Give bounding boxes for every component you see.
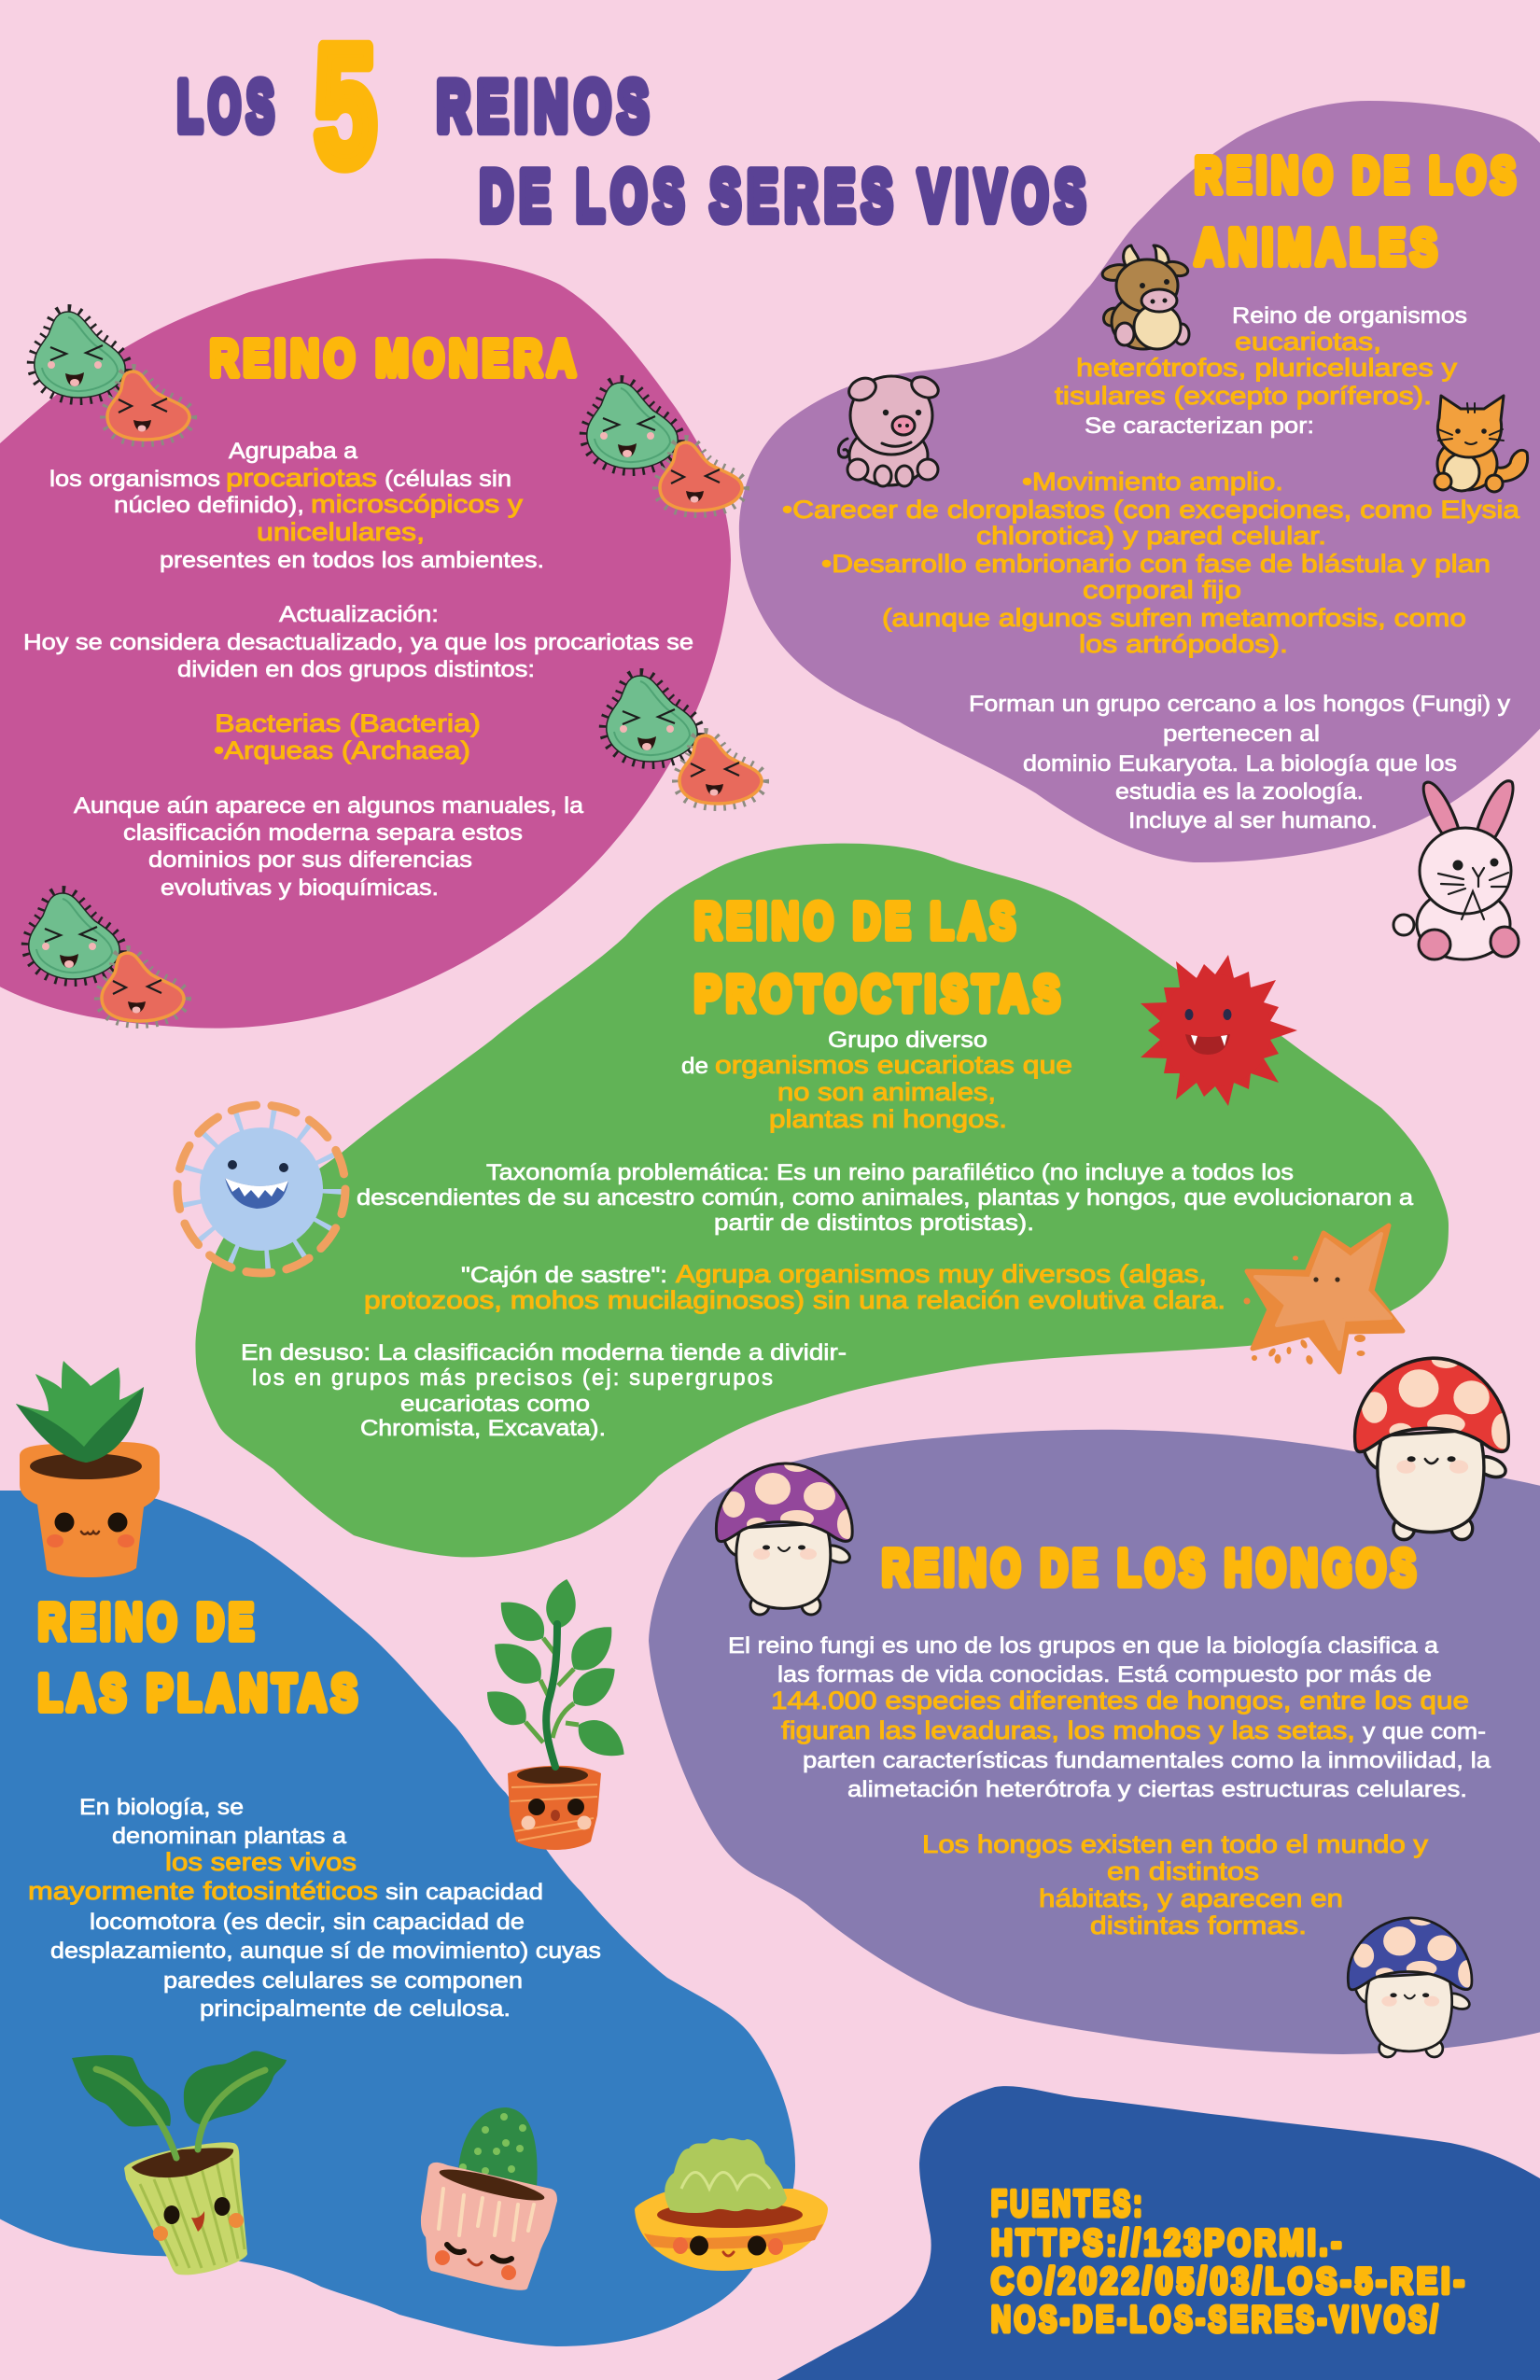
panel content: reino de los animales [782, 147, 1520, 833]
text block: protoctistas description: Taxonomía problemática: Es un reino parafilético (no incluye a todos los [486, 1160, 1294, 1185]
icon: bacteria pair top left [35, 312, 189, 440]
text block: monera description: dividen en dos grupos distintos: [177, 657, 535, 682]
icon: rabbit [1393, 781, 1519, 959]
text block: hongos description: Los hongos existen en todo el mundo y [922, 1830, 1429, 1858]
text block: animales description: pertenecen al [1163, 721, 1320, 747]
text block: animales description: Incluye al ser humano. [1128, 808, 1378, 833]
icon: cactus in pink pot [421, 2107, 557, 2290]
icon: tiger cat [1435, 396, 1528, 492]
panel content: reino de los hongos [728, 1540, 1491, 1939]
panel shape: reino de las protoctistas [195, 844, 1449, 1557]
text block: plantas description: los seres vivos [165, 1848, 357, 1876]
icon: succulent in orange pot [16, 1361, 160, 1577]
title: LOS [177, 67, 280, 147]
text block: monera description [23, 439, 693, 901]
text block: protoctistas description: partir de distintos protistas). [714, 1211, 1034, 1236]
heading: reino de las protoctistas [694, 893, 1065, 1022]
text block: monera description: Aunque aún aparece en algunos manuales, la [74, 793, 584, 819]
text block: protoctistas description: "Cajón de sastre": [461, 1263, 667, 1288]
text block: protoctistas description: no son animales, [777, 1078, 996, 1106]
text block: protoctistas description: los en grupos más precisos (ej: supergrupos [252, 1365, 773, 1391]
text block: monera description: Actualización: [279, 602, 439, 627]
panel shape: reino monera [0, 259, 731, 1029]
heading: reino de las plantas: REINO DE [38, 1594, 259, 1650]
text block: monera description: procariotas [226, 464, 377, 492]
text block: protoctistas description: Agrupa organismos muy diversos (algas, [676, 1260, 1207, 1288]
text block: protoctistas description: descendientes de su ancestro común, como animales, plantas y hongos, que evolucionaron a [357, 1185, 1414, 1211]
text block: hongos description: parten características fundamentales como la inmovilidad, la [803, 1748, 1491, 1773]
title [177, 10, 1092, 236]
panel content: fuentes [991, 2184, 1468, 2340]
text block: monera description: Agrupaba a [229, 439, 358, 464]
panel shape: reino de los hongos [649, 1430, 1540, 2054]
text block: hongos description [728, 1633, 1491, 1939]
text block: animales description: los artrópodos). [1079, 630, 1288, 658]
text block: protoctistas description: En desuso: La clasificación moderna tiende a dividir- [241, 1340, 847, 1365]
title number 5: 5 [315, 10, 376, 201]
text block: animales description: •Desarrollo embrionario con fase de blástula y plan [821, 550, 1491, 578]
heading: reino de los animales: ANIMALES [1195, 219, 1442, 275]
panel shape: reino de las plantas [0, 1491, 795, 2346]
text block: sources: FUENTES: [991, 2184, 1145, 2224]
text block: monera description: dominios por sus diferencias [148, 847, 472, 873]
text block: plantas description: mayormente fotosintéticos [28, 1877, 378, 1905]
text block: protoctistas description: Grupo diverso [828, 1028, 987, 1053]
text block: monera description: Hoy se considera desactualizado, ya que los procariotas se [23, 630, 693, 655]
icon: cow [1101, 245, 1189, 349]
text block: plantas description: denominan plantas a [112, 1824, 347, 1849]
text block: animales description: Forman un grupo cercano a los hongos (Fungi) y [969, 692, 1510, 717]
icon: bacteria pair middle right [607, 676, 762, 804]
text block: protoctistas description: plantas ni hongos. [769, 1105, 1007, 1133]
heading: reino de las protoctistas: PROTOCTISTAS [694, 966, 1065, 1022]
heading: reino monera: REINO MONERA [210, 330, 581, 386]
text block: monera description: microscópicos y [311, 490, 524, 518]
panel content: reino de las plantas [28, 1594, 601, 2022]
text block: animales description: Se caracterizan por: [1085, 413, 1314, 439]
text block: hongos description: 144.000 especies diferentes de hongos, entre los que [771, 1687, 1469, 1715]
text block: plantas description: principalmente de celulosa. [200, 1996, 511, 2022]
text block: animales description [782, 303, 1520, 833]
text block: animales description: (aunque algunos sufren metamorfosis, como [882, 604, 1466, 632]
text block: monera description: unicelulares, [257, 518, 425, 546]
text block: plantas description: sin capacidad [385, 1880, 543, 1905]
text block: sources: HTTPS://123PORMI.- [991, 2223, 1345, 2263]
text block: hongos description: y que com- [1363, 1719, 1486, 1744]
text block: hongos description: distintas formas. [1090, 1911, 1307, 1939]
text block: animales description: chlorotica) y pared celular. [976, 522, 1326, 550]
text block: hongos description: figuran las levaduras, los mohos y las setas, [781, 1716, 1355, 1744]
text block: monera description: (células sin [385, 467, 511, 492]
text block: monera description: •Arqueas (Archaea) [214, 736, 470, 764]
panel shape: fuentes [761, 2086, 1540, 2380]
icon: blue mushroom [1348, 1911, 1477, 2057]
icon: red spiky protist [1141, 955, 1297, 1106]
text block: protoctistas description: Chromista, Excavata). [360, 1416, 606, 1441]
text block: monera description: núcleo definido), [114, 493, 304, 518]
panel content: reino monera [23, 330, 693, 901]
title: DE LOS SERES VIVOS [480, 157, 1092, 236]
text block: protoctistas description: eucariotas como [400, 1392, 590, 1417]
text block: monera description: Bacterias (Bacteria) [215, 709, 481, 737]
heading: reino de las protoctistas: REINO DE LAS [694, 893, 1020, 949]
text block: plantas description: En biología, se [79, 1795, 244, 1820]
icon: plant in yellow bowl [635, 2138, 828, 2271]
text block: hongos description: hábitats, y aparecen en [1039, 1884, 1343, 1912]
text block: animales description: heterótrofos, pluricelulares y [1076, 354, 1458, 382]
icon: purple mushroom [716, 1457, 858, 1615]
text block: plantas description: desplazamiento, aunque sí de movimiento) cuyas [50, 1939, 601, 1964]
text block: hongos description: El reino fungi es uno de los grupos en que la biología clasifica a [728, 1633, 1439, 1659]
text block: animales description: dominio Eukaryota. La biología que los [1023, 751, 1457, 777]
panel shape: reino de los animales [739, 101, 1540, 862]
icon: red mushroom [1355, 1351, 1515, 1540]
text block: sources: CO/2022/05/03/LOS-5-REI- [991, 2261, 1468, 2302]
text block: protoctistas description: organismos eucariotas que [715, 1051, 1072, 1079]
text block: animales description: tisulares (excepto poríferos). [1055, 382, 1432, 410]
text block: monera description: evolutivas y bioquímicas. [161, 875, 439, 901]
text block: protoctistas description: de [681, 1054, 708, 1079]
text block: monera description: los organismos [49, 467, 220, 492]
text block: plantas description [28, 1795, 601, 2022]
text block: animales description: •Movimiento amplio. [1022, 468, 1283, 496]
text block: animales description: eucariotas, [1235, 328, 1381, 356]
icon: bacteria pair right [587, 383, 742, 511]
text block: hongos description: en distintos [1107, 1857, 1259, 1885]
panel content: reino de las protoctistas [241, 893, 1414, 1441]
text block: animales description: estudia es la zoología. [1115, 779, 1364, 805]
text block: animales description: corporal fijo [1083, 576, 1241, 604]
text block: protoctistas description: protozoos, mohos mucilaginosos) sin una relación evolutiva clara. [364, 1286, 1225, 1314]
text block: animales description: •Carecer de cloroplastos (con excepciones, como Elysia [782, 496, 1520, 524]
text block: hongos description: las formas de vida conocidas. Está compuesto por más de [777, 1662, 1432, 1687]
heading: reino de las plantas: LAS PLANTAS [38, 1665, 362, 1721]
heading: reino de los animales [1195, 147, 1520, 275]
text block: monera description: presentes en todos los ambientes. [160, 548, 544, 573]
text block: plantas description: locomotora (es decir, sin capacidad de [90, 1910, 525, 1935]
title: REINOS [437, 67, 655, 147]
icon: pig [838, 373, 942, 486]
icon: vine in orange pot [478, 1576, 633, 1850]
text block: monera description: clasificación moderna separa estos [123, 820, 523, 846]
heading: reino de las plantas [38, 1594, 362, 1721]
icon: blue virus [177, 1105, 345, 1273]
text block: animales description: Reino de organismos [1232, 303, 1467, 329]
icon: bacteria pair bottom left [29, 893, 184, 1021]
icon: orange star [1243, 1225, 1403, 1372]
text block: sources [991, 2184, 1468, 2340]
text block: protoctistas description [241, 1028, 1414, 1441]
text block: hongos description: alimetación heterótrofa y ciertas estructuras celulares. [847, 1777, 1467, 1802]
text block: plantas description: paredes celulares se componen [163, 1968, 523, 1994]
icon: plant in green pot [72, 2051, 287, 2275]
